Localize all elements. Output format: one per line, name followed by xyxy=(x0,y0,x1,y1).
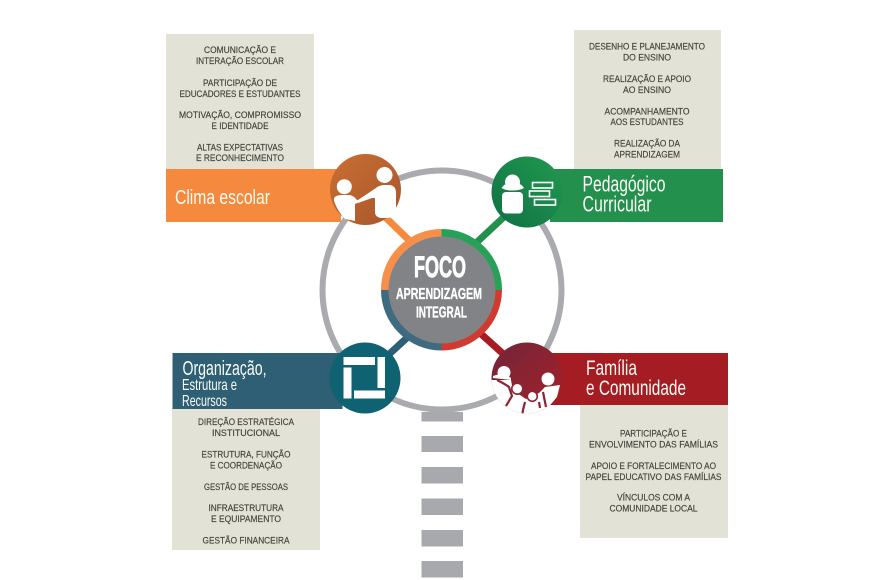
icon: family group xyxy=(490,342,562,416)
panel: pedagógico curricular list: REALIZAÇÃO DA xyxy=(614,138,681,148)
banner: pedagógico curricular: Curricular xyxy=(582,192,652,216)
banner: família e comunidade: e Comunidade xyxy=(586,377,686,400)
infographic xyxy=(166,30,728,578)
banner: clima escolar: Clima escolar xyxy=(175,187,270,209)
panel: organização list: ESTRUTURA, FUNÇÃO xyxy=(202,448,290,460)
panel: organização list: GESTÃO DE PESSOAS xyxy=(204,481,288,492)
panel: organização list: E EQUIPAMENTO xyxy=(211,513,281,524)
panel: pedagógico curricular list xyxy=(574,30,721,170)
panel: família list: ENVOLVIMENTO DAS FAMÍLIAS xyxy=(589,438,718,450)
panel: família list: PARTICIPAÇÃO E xyxy=(620,428,687,438)
icon: student and books xyxy=(492,156,562,228)
subheading: aprendizagem integral xyxy=(396,286,482,322)
dashed grey column xyxy=(422,412,463,578)
panel: pedagógico curricular list: AO ENSINO xyxy=(623,84,671,95)
panel: organização list xyxy=(172,408,320,550)
panel: clima escolar list xyxy=(166,34,314,170)
panel: família list: VÍNCULOS COM A xyxy=(617,492,691,502)
banner: organização xyxy=(172,353,342,410)
panel: clima escolar list: E RECONHECIMENTO xyxy=(196,152,284,163)
panel: família list xyxy=(580,404,728,538)
panel: clima escolar list: COMUNICAÇÃO E xyxy=(204,44,276,55)
panel: pedagógico curricular list: DO ENSINO xyxy=(623,52,671,62)
panel: pedagógico curricular list: REALIZAÇÃO E APOIO xyxy=(603,73,691,84)
subheading: aprendizagem integral: INTEGRAL xyxy=(416,304,467,322)
panel: pedagógico curricular list: APRENDIZAGEM xyxy=(614,148,680,160)
banner: organização: Recursos xyxy=(182,393,227,410)
panel: organização list: GESTÃO FINANCEIRA xyxy=(202,534,290,546)
banner: pedagógico curricular: Pedagógico xyxy=(582,172,666,196)
panel: família list: PAPEL EDUCATIVO DAS FAMÍLIAS xyxy=(586,471,722,482)
subheading: aprendizagem integral: APRENDIZAGEM xyxy=(396,286,482,303)
panel: organização list: INSTITUCIONAL xyxy=(212,427,280,438)
panel: organização list: E COORDENAÇÃO xyxy=(210,460,282,470)
outer grey ring xyxy=(322,170,562,410)
heading: foco: FOCO xyxy=(414,251,466,284)
banner: família e comunidade xyxy=(550,353,728,405)
panel: pedagógico curricular list: AOS ESTUDANTES xyxy=(610,116,684,127)
banner: pedagógico curricular xyxy=(550,169,723,222)
panel: organização list: INFRAESTRUTURA xyxy=(208,502,284,513)
banner: organização: Estrutura e xyxy=(182,377,237,394)
panel: família list: COMUNIDADE LOCAL xyxy=(610,502,698,514)
panel: clima escolar list: MOTIVAÇÃO, COMPROMISSO xyxy=(179,109,301,120)
panel: clima escolar list: ALTAS EXPECTATIVAS xyxy=(197,142,283,152)
banner: organização: Organização, xyxy=(182,358,266,380)
panel: clima escolar list: E IDENTIDADE xyxy=(212,120,268,131)
banner: clima escolar xyxy=(166,169,341,222)
panel: pedagógico curricular list: DESENHO E PLANEJAMENTO xyxy=(589,40,705,52)
icon: handshake xyxy=(330,154,401,225)
panel: pedagógico curricular list: ACOMPANHAMENTO xyxy=(604,106,690,116)
panel: família list: APOIO E FORTALECIMENTO AO xyxy=(591,460,716,471)
center disc: foco xyxy=(381,229,502,350)
panel: clima escolar list: EDUCADORES E ESTUDANTES xyxy=(180,88,300,99)
panel: clima escolar list: INTERAÇÃO ESCOLAR xyxy=(196,55,284,66)
icon: structure square xyxy=(330,342,400,414)
panel: organização list: DIREÇÃO ESTRATÉGICA xyxy=(198,416,295,427)
connector lines xyxy=(383,215,510,360)
panel: clima escolar list: PARTICIPAÇÃO DE xyxy=(203,77,277,88)
banner: família e comunidade: Família xyxy=(586,357,637,380)
